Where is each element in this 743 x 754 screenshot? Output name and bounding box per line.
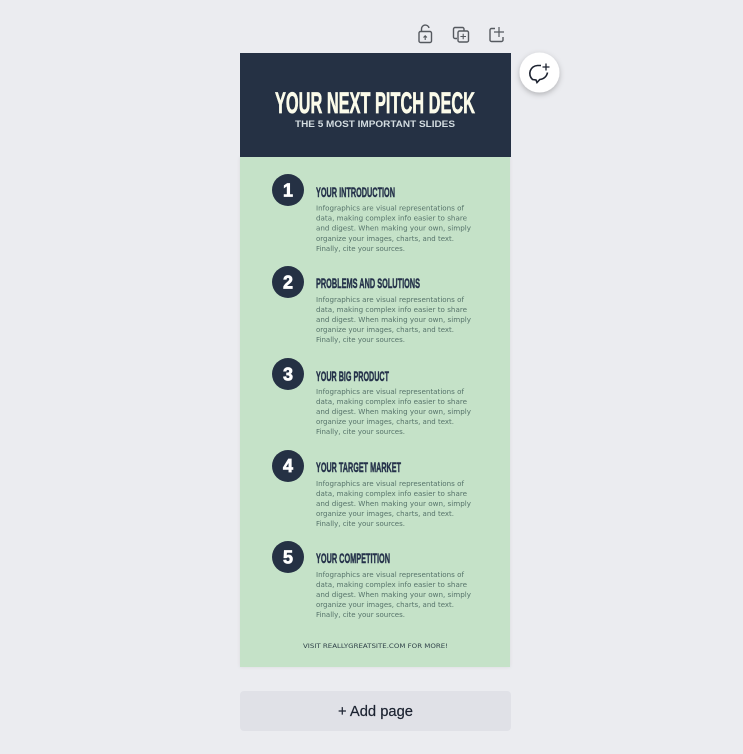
number badge 3 — [272, 358, 304, 390]
footer text: VISIT REALLYGREATSITE.COM FOR MORE! — [303, 643, 448, 650]
body 4: data, making complex info easier to share — [316, 489, 468, 498]
number badge 3: 3 — [283, 364, 293, 384]
heading 4: YOUR TARGET MARKET — [316, 459, 401, 475]
body 1: data, making complex info easier to share — [316, 214, 468, 222]
body 2: data, making complex info easier to share — [316, 305, 468, 314]
body 1: and digest. When making your own, simply — [316, 224, 472, 232]
body 5: organize your images, charts, and text. — [316, 600, 454, 609]
body 2: Infographics are visual representations of — [316, 295, 464, 304]
body 4: organize your images, charts, and text. — [316, 509, 454, 518]
subtitle: THE 5 MOST IMPORTANT SLIDES — [295, 119, 455, 129]
body 2: organize your images, charts, and text. — [316, 325, 454, 334]
number badge 2 — [272, 266, 304, 298]
number badge 2: 2 — [283, 272, 293, 292]
step 2 — [272, 266, 472, 344]
step 4 — [272, 450, 472, 528]
add page button — [240, 691, 511, 731]
body 3: organize your images, charts, and text. — [316, 417, 454, 426]
body 3: Finally, cite your sources. — [316, 427, 405, 436]
panel: infographic page — [240, 53, 511, 667]
body 3: data, making complex info easier to share — [316, 397, 468, 406]
body 1: Infographics are visual representations of — [316, 204, 464, 212]
body 2: and digest. When making your own, simply — [316, 315, 472, 324]
body 5: Infographics are visual representations of — [316, 570, 464, 579]
number badge 5: 5 — [283, 548, 293, 568]
number badge 4 — [272, 450, 304, 482]
body 5 — [316, 570, 472, 619]
panel: header band — [240, 53, 511, 157]
body 4 — [316, 479, 472, 528]
title: YOUR NEXT PITCH DECK — [275, 87, 475, 120]
number badge 1 — [272, 174, 304, 206]
icon: comment plus — [530, 64, 550, 82]
comment button — [520, 52, 560, 92]
body 5: data, making complex info easier to share — [316, 580, 468, 589]
number badge 1: 1 — [283, 180, 293, 200]
icon: add page — [490, 27, 504, 42]
body 3: and digest. When making your own, simply — [316, 407, 472, 416]
number badge 4: 4 — [283, 456, 293, 476]
body 3 — [316, 387, 472, 436]
body 5: Finally, cite your sources. — [316, 610, 405, 619]
icon: duplicate page — [454, 28, 468, 42]
icon: lock — [419, 25, 432, 42]
heading 2: PROBLEMS AND SOLUTIONS — [316, 275, 420, 291]
body 1: Finally, cite your sources. — [316, 244, 405, 253]
heading 1: YOUR INTRODUCTION — [316, 184, 395, 200]
step 1 — [272, 174, 472, 253]
heading 3: YOUR BIG PRODUCT — [316, 368, 389, 384]
body 4: and digest. When making your own, simply — [316, 499, 472, 508]
body 2 — [316, 295, 472, 344]
body 2: Finally, cite your sources. — [316, 335, 405, 344]
number badge 5 — [272, 541, 304, 573]
step 3 — [272, 358, 472, 436]
body 4: Finally, cite your sources. — [316, 519, 405, 528]
body 4: Infographics are visual representations of — [316, 479, 464, 488]
button label: + Add page — [338, 703, 413, 720]
body 1: organize your images, charts, and text. — [316, 234, 454, 243]
body 1 — [316, 204, 472, 253]
body 3: Infographics are visual representations of — [316, 387, 464, 396]
body 5: and digest. When making your own, simply — [316, 590, 472, 599]
heading 5: YOUR COMPETITION — [316, 550, 390, 566]
step 5 — [272, 541, 472, 619]
